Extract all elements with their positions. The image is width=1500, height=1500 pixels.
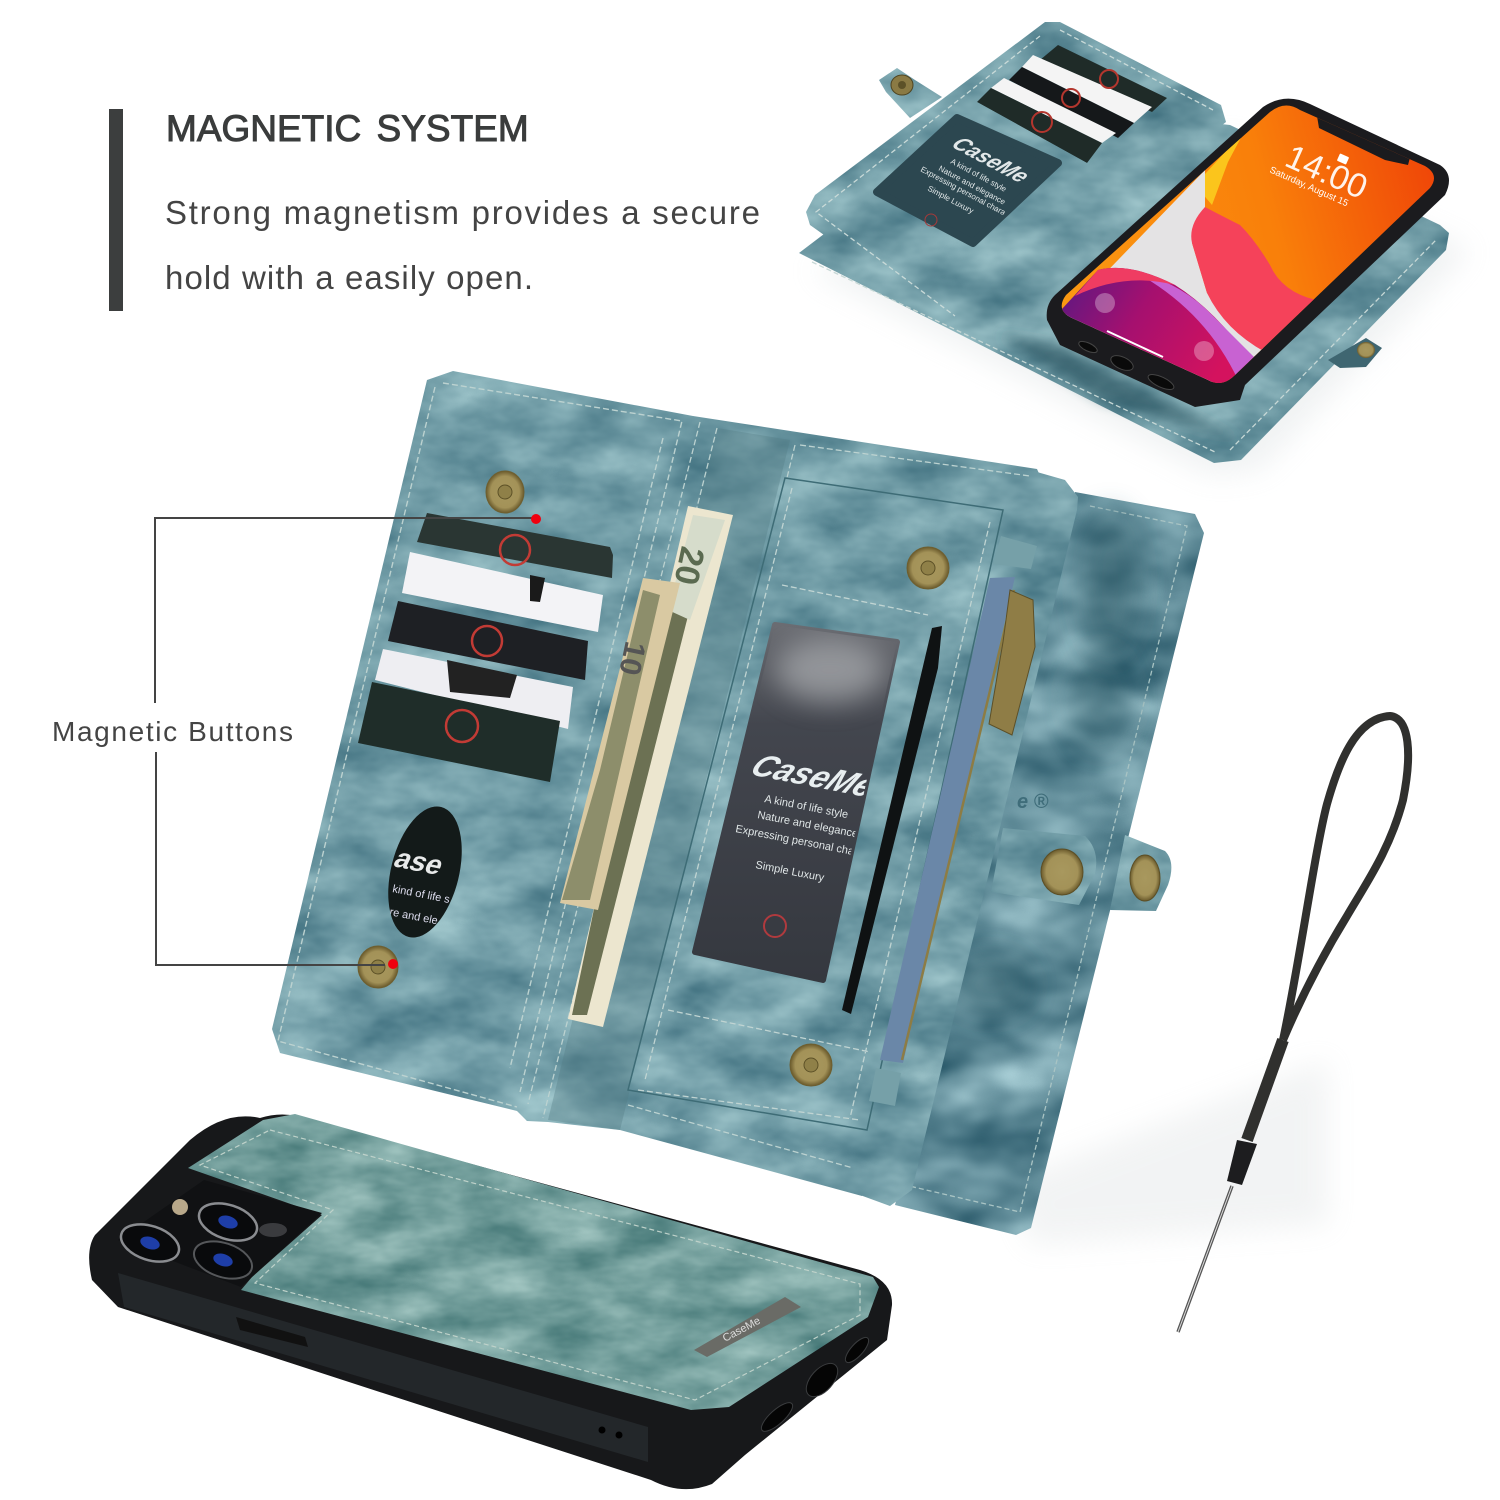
soft shadow under wallet — [1010, 1060, 1328, 1245]
top wallet strap and button — [879, 68, 942, 118]
top phone notch — [1317, 118, 1410, 165]
top wallet clasp right — [1328, 338, 1382, 368]
black bumper — [89, 1114, 892, 1489]
top product photo: wallet and phone — [799, 22, 1470, 475]
top wallet card pocket — [844, 42, 1178, 273]
flap oval window: ase — [389, 843, 449, 881]
heading: magnetic system: MAGNETIC SYSTEM — [166, 108, 529, 149]
spine and lower pocket — [517, 416, 1042, 1196]
description text: Strong magnetism provides a secure — [165, 194, 760, 231]
main product photo: open wallet — [272, 371, 1328, 1245]
bottom left button — [358, 946, 398, 988]
money — [560, 506, 733, 1027]
card 3 — [388, 601, 588, 680]
phone slit — [842, 626, 942, 1014]
top phone ports — [1077, 339, 1176, 392]
wallet window with brand card: Nature and elegance — [756, 809, 859, 840]
heading accent bar — [109, 109, 123, 311]
embossed brand mark: e ® — [1017, 791, 1049, 813]
wallet window with brand card: A kind of life style — [763, 793, 849, 821]
top phone clock: 14:00 — [1280, 138, 1373, 207]
side button — [236, 1317, 308, 1347]
card 2 — [402, 552, 603, 632]
phone case back — [89, 1114, 892, 1489]
top phone lock buttons — [1095, 293, 1214, 361]
wallet window with brand card: CaseMe — [743, 749, 883, 804]
wallet window with brand card: Simple Luxury — [754, 859, 826, 884]
left flap magnetic button — [486, 471, 524, 513]
camera block — [116, 1180, 322, 1287]
top phone home indicator — [1107, 331, 1163, 357]
leather back — [188, 1114, 879, 1410]
inner wallet buttons — [790, 547, 949, 1086]
ports — [757, 1334, 872, 1436]
cards — [358, 513, 613, 782]
wrist strap — [1178, 716, 1408, 1332]
left flap — [272, 371, 705, 1121]
side panel — [118, 1273, 648, 1462]
top wallet window with brand text: Nature and elegance — [937, 164, 1007, 207]
callout: magnetic buttons lines — [155, 518, 535, 965]
flap oval window: kind of life s — [391, 883, 451, 906]
clasp strap — [991, 828, 1171, 911]
zipper — [869, 536, 1037, 1106]
top phone screen — [1062, 106, 1434, 383]
top wallet pocket flap — [844, 102, 1110, 310]
inner wallet front flap — [628, 478, 1003, 1130]
back panel right — [895, 492, 1204, 1235]
top wallet window with brand text: CaseMe — [946, 133, 1036, 187]
top wallet cards — [977, 45, 1167, 163]
metal logo plate — [694, 1297, 801, 1357]
microphone holes — [598, 1426, 622, 1438]
flap oval window — [388, 806, 462, 938]
zip pouch wall — [860, 470, 1078, 1206]
top wallet lower cover — [799, 100, 1449, 463]
callout dots — [388, 514, 541, 969]
leather stitching — [200, 1130, 860, 1400]
zipper pull — [989, 590, 1035, 735]
top wallet window with brand text: Simple Luxury — [926, 184, 975, 216]
card 4 — [375, 649, 573, 729]
card logos — [446, 535, 530, 742]
description text: hold with a easily open. — [165, 259, 533, 296]
money: 10 — [612, 639, 651, 678]
money: 20 — [666, 543, 711, 588]
card 1 — [417, 513, 613, 578]
card 5 — [358, 682, 560, 782]
description text — [165, 194, 760, 296]
top wallet window with brand text — [877, 118, 1058, 243]
top phone body — [1047, 99, 1449, 407]
top phone lock — [1337, 153, 1349, 165]
soft shadow under top wallet — [810, 140, 1470, 475]
callout label: Magnetic Buttons — [52, 716, 293, 747]
top phone date: Saturday, August 15 — [1268, 165, 1350, 209]
wallet window with brand card — [695, 625, 897, 980]
metal logo plate: CaseMe — [721, 1315, 763, 1345]
top wallet window with brand text: Expressing personal character — [919, 165, 1019, 224]
wallet window with brand card: Expressing personal character — [734, 823, 883, 863]
top wallet window with brand text: A kind of life style — [949, 157, 1008, 194]
top wallet upper piece — [806, 22, 1226, 328]
flap oval window: re and ele — [388, 906, 439, 927]
